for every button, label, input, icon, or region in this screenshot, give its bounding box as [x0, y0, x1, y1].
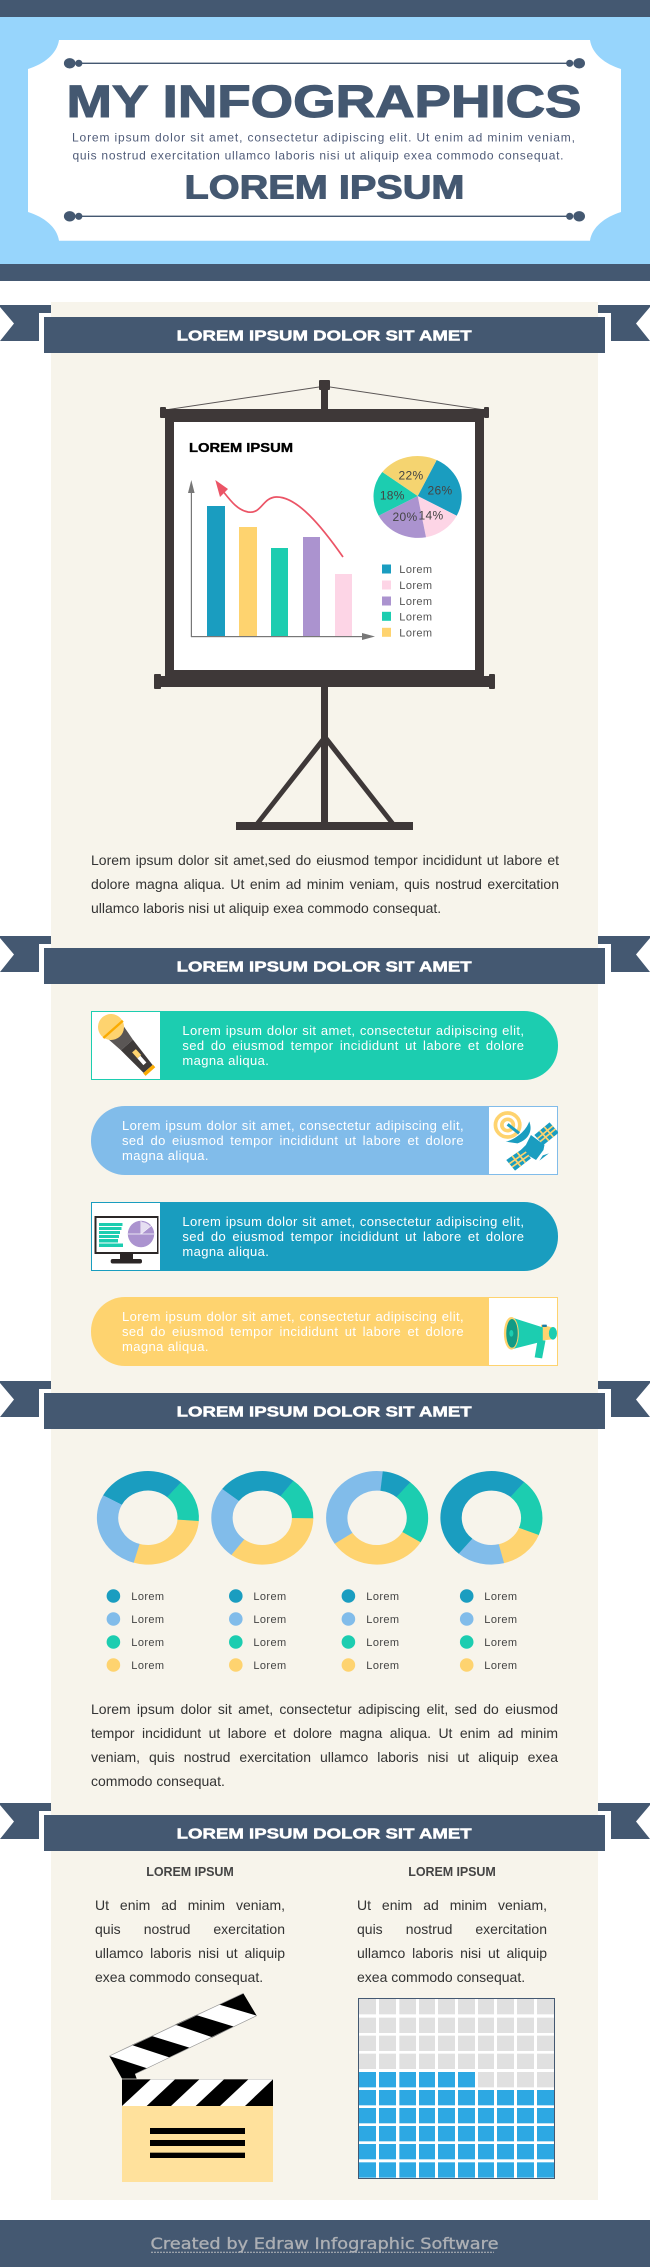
donut chart 3 [320, 1466, 434, 1570]
section banner 3 [0, 1381, 650, 1429]
item text [122, 1309, 464, 1354]
item text: magna aliqua. [182, 1053, 269, 1068]
paragraph two: tempor incididunt ut labore et dolore magna aliqua. Ut enim ad minim [91, 1725, 558, 1741]
legend column 2: Lorem [253, 1614, 287, 1626]
banner bar [44, 317, 605, 353]
ribbon tails [0, 1381, 650, 1417]
intro text: quis nostrud exercitation ullamco laboris nisi ut aliquip exea commodo consequat. [72, 149, 564, 163]
pie chart: 26% [428, 484, 452, 498]
icon: film clapperboard [109, 1993, 273, 2182]
legend column 4: Lorem [484, 1637, 517, 1649]
ribbon tails [0, 305, 650, 341]
section banner 4 [0, 1803, 650, 1851]
right column text: exea commodo consequat. [357, 1968, 525, 1984]
title ticket [28, 40, 621, 241]
legend column 3: Lorem [366, 1660, 399, 1672]
legend column 1: Lorem [131, 1637, 164, 1649]
section banner 2 [0, 936, 650, 984]
main title: MY INFOGRAPHICS [66, 76, 582, 127]
paragraph two: Lorem ipsum dolor sit amet, consectetur adipiscing elit, sed do eiusmod [91, 1701, 558, 1717]
banner bar [44, 1393, 605, 1429]
presentation screen with charts [154, 380, 495, 830]
legend column 3 [342, 1589, 399, 1672]
header bottom stripe [0, 264, 650, 281]
section banner 1 [0, 305, 650, 353]
donut legends [106, 1589, 517, 1672]
intro text: Lorem ipsum dolor sit amet, consectetur adipiscing elit. Ut enim ad minim veniam, [72, 131, 575, 145]
header band [0, 0, 650, 281]
item text: sed do eiusmod tempor incididunt ut labore et dolore [122, 1324, 464, 1339]
paragraph two: commodo consequat. [91, 1773, 225, 1789]
chart legend: Lorem [399, 596, 432, 608]
item text: Lorem ipsum dolor sit amet, consectetur adipiscing elit, [122, 1309, 464, 1324]
legend column 3: Lorem [366, 1591, 399, 1603]
banner bar [44, 1815, 605, 1851]
pie chart: 14% [419, 508, 443, 522]
legend column 1: Lorem [131, 1660, 164, 1672]
left column text [95, 1896, 285, 1985]
right column text: quis nostrud exercitation [357, 1920, 547, 1936]
list item: monitor [91, 1202, 558, 1271]
donut chart 4 [435, 1466, 548, 1570]
legend column 4: Lorem [484, 1660, 517, 1672]
chart axes [188, 480, 375, 640]
left column text: exea commodo consequat. [95, 1968, 263, 1984]
donut charts [96, 1471, 542, 1565]
item text: magna aliqua. [182, 1244, 269, 1259]
paragraph one: dolore magna aliqua. Ut enim ad minim veniam, quis nostrud exercitation [91, 876, 559, 892]
legend column 2: Lorem [253, 1591, 287, 1603]
right column heading: LOREM IPSUM [408, 1865, 496, 1879]
legend column 2 [229, 1589, 287, 1672]
banner heading: LOREM IPSUM DOLOR SIT AMET [177, 328, 472, 344]
legend column 1: Lorem [131, 1614, 164, 1626]
banner heading: LOREM IPSUM DOLOR SIT AMET [177, 958, 472, 976]
banner bar [44, 948, 605, 984]
item text [182, 1023, 524, 1068]
donut chart 2 [206, 1466, 319, 1570]
pie chart: 18% [380, 488, 405, 502]
list item: microphone [91, 1011, 558, 1080]
header top stripe [0, 0, 650, 17]
banner heading: LOREM IPSUM DOLOR SIT AMET [177, 1404, 472, 1420]
legend column 1 [107, 1589, 164, 1672]
right column text [357, 1896, 547, 1985]
item text [182, 1214, 524, 1259]
screen frame [165, 409, 484, 687]
item text: magna aliqua. [122, 1339, 209, 1354]
item text: sed do eiusmod tempor incididunt ut labore et dolore [122, 1133, 464, 1148]
item text: magna aliqua. [122, 1148, 209, 1163]
chart title: LOREM IPSUM [189, 440, 293, 455]
right column text: Ut enim ad minim veniam, [357, 1896, 547, 1912]
chart legend: Lorem [399, 627, 432, 639]
item text: sed do eiusmod tempor incididunt ut labore et dolore [182, 1229, 524, 1244]
stand [154, 380, 495, 830]
footer [0, 2220, 650, 2267]
top ornament line [64, 58, 585, 68]
donut chart 1 [91, 1466, 205, 1570]
left column text: Ut enim ad minim veniam, [95, 1896, 285, 1912]
chart legend: Lorem [399, 611, 432, 623]
pie chart: 22% [399, 468, 423, 482]
legend column 4: Lorem [484, 1591, 517, 1603]
waffle chart [358, 1998, 555, 2179]
item text: Lorem ipsum dolor sit amet, consectetur adipiscing elit, [182, 1023, 524, 1038]
subtitle: LOREM IPSUM [184, 169, 464, 206]
banner heading: LOREM IPSUM DOLOR SIT AMET [177, 1826, 472, 1842]
icon: microphone [91, 1011, 161, 1080]
icon: monitor [91, 1202, 161, 1271]
item text: sed do eiusmod tempor incididunt ut labore et dolore [182, 1038, 524, 1053]
ribbon tails [0, 936, 650, 972]
chart legend [382, 564, 432, 639]
footer credit: Created by Edraw Infographic Software [150, 2234, 498, 2253]
left column text: ullamco laboris nisi ut aliquip [95, 1944, 285, 1960]
paragraph one: Lorem ipsum dolor sit amet,sed do eiusmod tempor incididunt ut labore et [91, 852, 559, 868]
list item: satellite [91, 1106, 558, 1175]
pie chart [374, 456, 462, 538]
item text: Lorem ipsum dolor sit amet, consectetur adipiscing elit, [122, 1118, 464, 1133]
intro text [72, 131, 575, 163]
legend column 1: Lorem [131, 1591, 164, 1603]
legend column 3: Lorem [366, 1614, 399, 1626]
icon: satellite [488, 1106, 558, 1175]
icon: megaphone [488, 1297, 558, 1366]
paragraph one: ullamco laboris nisi ut aliquip exea commodo consequat. [91, 900, 441, 916]
bottom ornament line [64, 211, 585, 222]
bar chart [207, 506, 352, 636]
left column text: quis nostrud exercitation [95, 1920, 285, 1936]
chart legend: Lorem [399, 580, 432, 592]
legend column 4 [460, 1589, 517, 1672]
cream content panel [51, 302, 598, 2200]
right column text: ullamco laboris nisi ut aliquip [357, 1944, 547, 1960]
ticket shape [28, 40, 621, 241]
paragraph one [91, 852, 559, 916]
legend column 2: Lorem [253, 1637, 287, 1649]
left column heading: LOREM IPSUM [146, 1865, 234, 1879]
paragraph two: veniam, quis nostrud exercitation ullamco laboris nisi ut aliquip exea [91, 1749, 558, 1765]
chart legend: Lorem [399, 564, 432, 576]
item text [122, 1118, 464, 1163]
item text: Lorem ipsum dolor sit amet, consectetur adipiscing elit, [182, 1214, 524, 1229]
legend column 3: Lorem [366, 1637, 399, 1649]
legend column 4: Lorem [484, 1614, 517, 1626]
ribbon tails [0, 1803, 650, 1839]
legend column 2: Lorem [253, 1660, 287, 1672]
list item: megaphone [91, 1297, 558, 1366]
pie chart: 20% [393, 510, 417, 524]
trend arrow [215, 480, 343, 557]
paragraph two [91, 1701, 558, 1789]
